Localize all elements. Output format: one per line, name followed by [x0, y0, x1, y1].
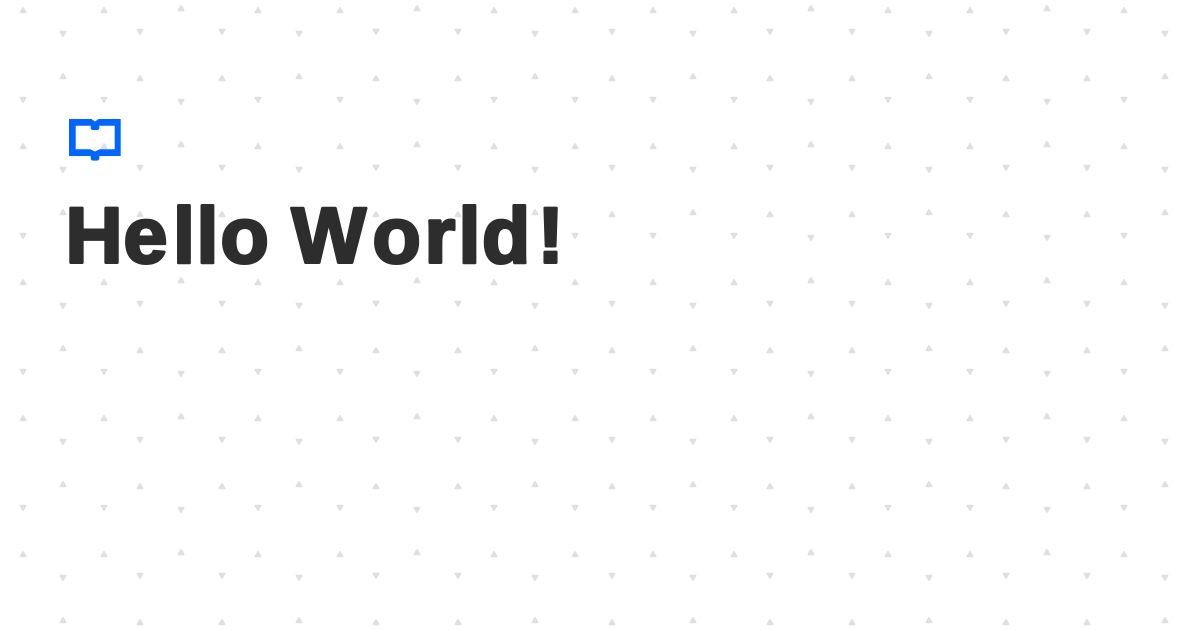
title: Hello World!	[66, 191, 564, 280]
icon: open book logo	[69, 119, 121, 161]
